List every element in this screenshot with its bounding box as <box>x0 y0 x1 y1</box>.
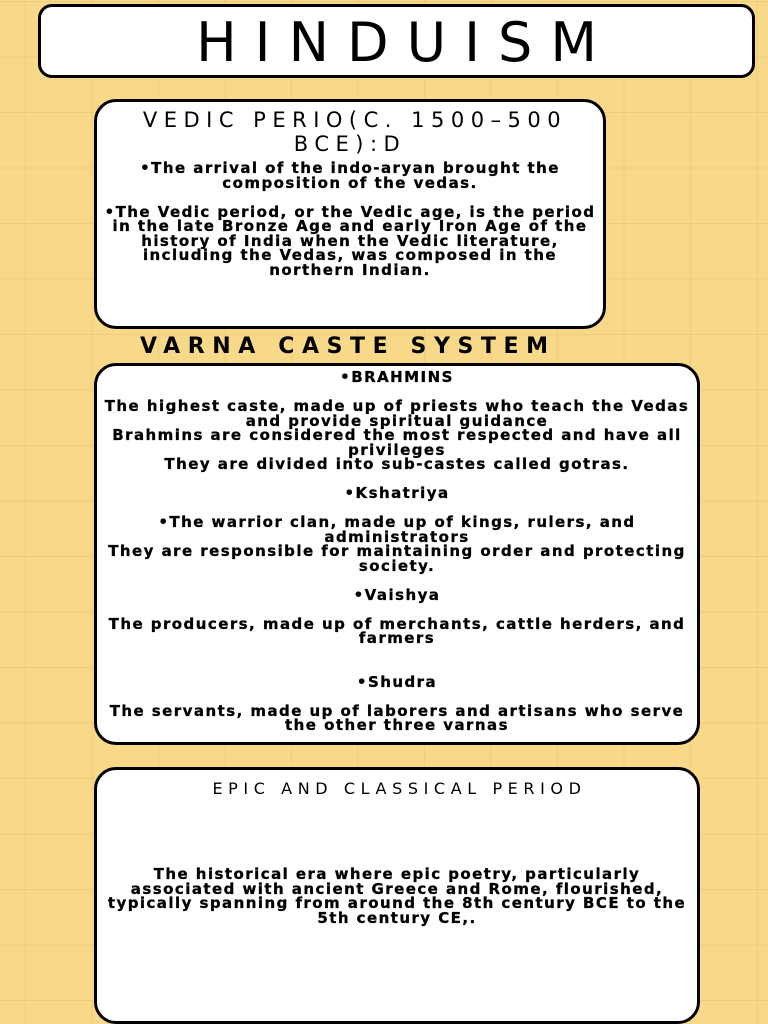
title: HINDUISM <box>196 11 615 74</box>
vedic text: history of India when the Vedic literature, <box>141 232 559 250</box>
vedic text: •The Vedic period, or the Vedic age, is the period <box>105 202 595 220</box>
vedic heading: BCE):D <box>294 132 406 156</box>
varna text: the other three varnas <box>285 716 509 734</box>
varna text: The producers, made up of merchants, cattle herders, and <box>109 614 685 632</box>
epic text: typically spanning from around the 8th century BCE to the <box>108 894 686 912</box>
epic heading: EPIC AND CLASSICAL PERIOD <box>212 779 587 798</box>
vedic text: •The arrival of the indo-aryan brought the <box>140 159 560 177</box>
panel: epic and classical period <box>94 767 700 1024</box>
varna text: The servants, made up of laborers and artisans who serve <box>110 702 684 720</box>
vedic text: northern Indian. <box>269 260 431 278</box>
varna text: privileges <box>348 440 446 458</box>
epic text: associated with ancient Greece and Rome, flourished, <box>131 880 663 898</box>
varna text: They are responsible for maintaining order and protecting <box>108 542 686 560</box>
varna text: farmers <box>359 629 435 647</box>
varna text: The highest caste, made up of priests who teach the Vedas <box>105 397 689 415</box>
varna text: and provide spiritual guidance <box>246 412 548 430</box>
varna text: administrators <box>324 528 470 546</box>
epic text: The historical era where epic poetry, particularly <box>154 865 640 883</box>
varna text: •Kshatriya <box>344 484 450 502</box>
vedic text: in the late Bronze Age and early Iron Age of the <box>112 217 588 235</box>
vedic heading <box>143 108 567 156</box>
varna text: •BRAHMINS <box>340 368 454 386</box>
vedic heading: VEDIC PERIO(C. 1500–500 <box>143 108 567 132</box>
varna text: Brahmins are considered the most respected and have all <box>112 426 682 444</box>
varna heading: VARNA CASTE SYSTEM <box>140 334 556 359</box>
vedic text: including the Vedas, was composed in the <box>143 246 557 264</box>
panel: varna caste system <box>94 363 700 745</box>
epic text <box>108 865 686 926</box>
epic text: 5th century CE,. <box>317 908 477 926</box>
panel: vedic period <box>94 99 606 329</box>
varna text: They are divided into sub-castes called gotras. <box>164 455 630 473</box>
title box <box>38 4 755 78</box>
varna text: •The warrior clan, made up of kings, rulers, and <box>158 513 636 531</box>
varna text: •Vaishya <box>354 586 440 604</box>
varna text <box>104 368 689 734</box>
varna text: •Shudra <box>357 672 437 690</box>
vedic text: composition of the vedas. <box>222 174 478 192</box>
vedic text <box>105 159 595 278</box>
varna text: society. <box>359 556 435 574</box>
